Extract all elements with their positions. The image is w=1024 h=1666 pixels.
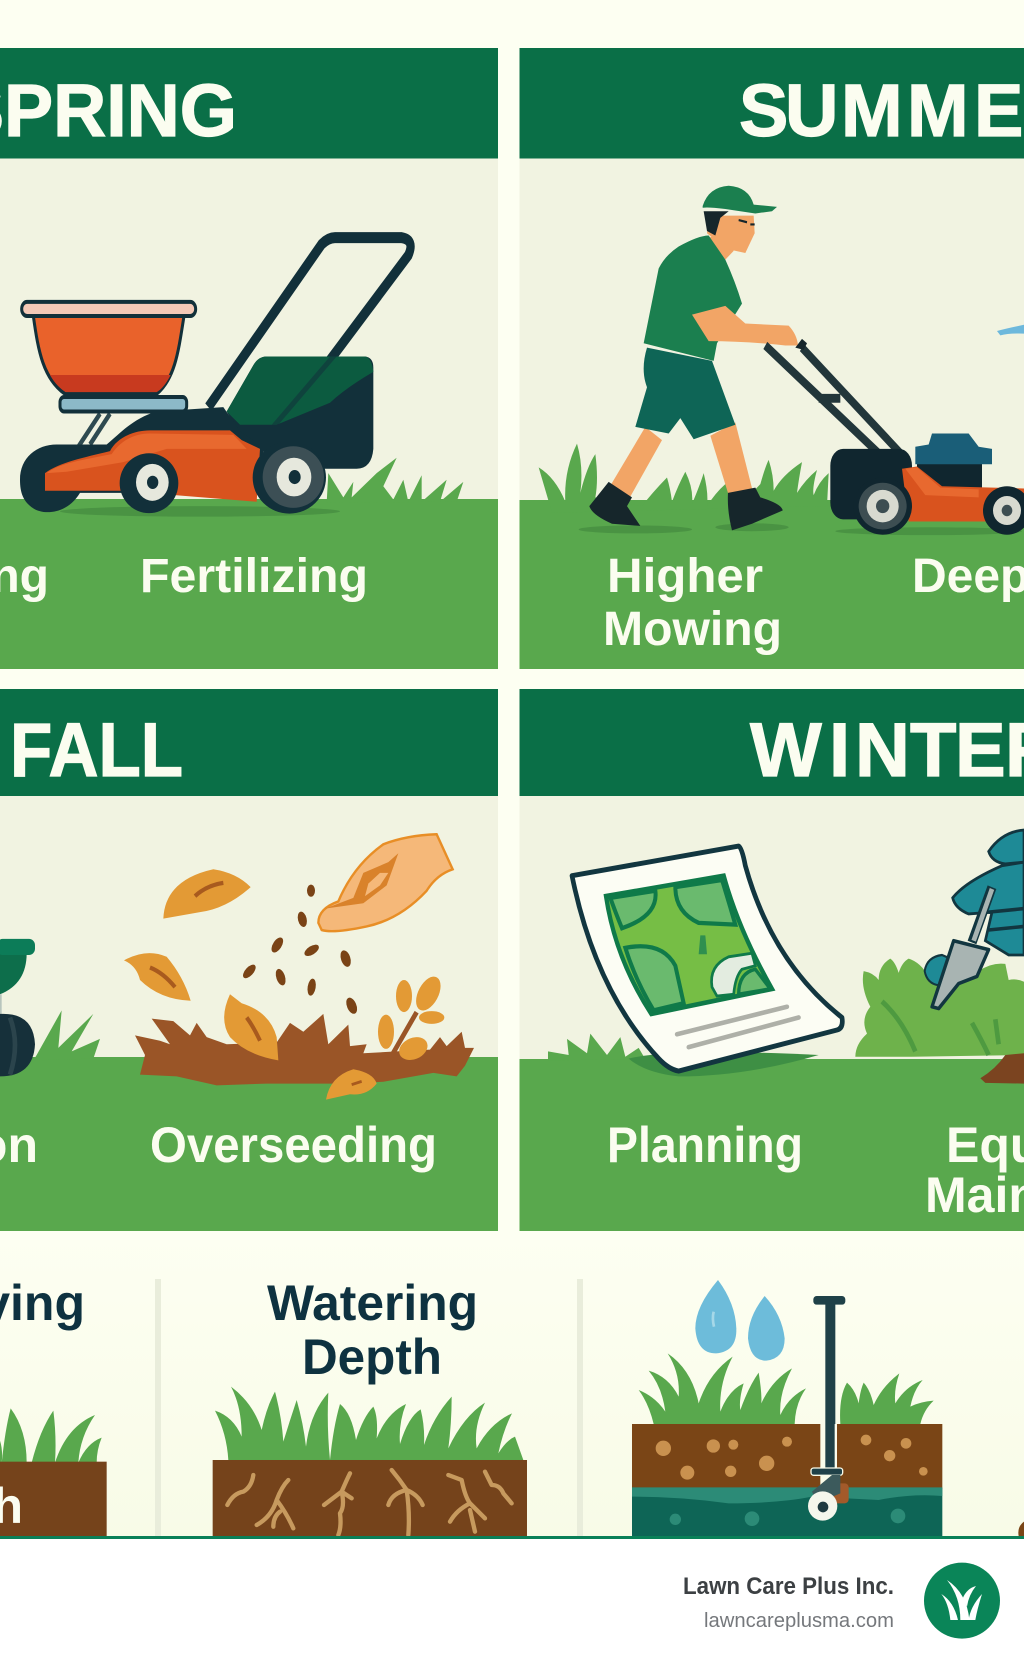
summer header bar <box>520 48 1024 158</box>
label: higher mowing <box>603 550 782 656</box>
winter ground <box>520 1059 1024 1231</box>
heading: watering depth: Watering <box>267 1275 478 1331</box>
fall header bar <box>0 689 498 796</box>
icon: logo <box>924 1563 1000 1639</box>
label: equipment maintenance <box>925 1117 1024 1223</box>
illustration: lawn plan and equipment <box>548 830 1024 1084</box>
illustration: man pushing mower <box>539 186 1024 535</box>
fall heading: FALL <box>10 708 183 793</box>
panel: summer <box>520 48 1024 669</box>
spring header bar <box>0 48 498 158</box>
illustration: fertilizer spreader and mower <box>20 238 463 517</box>
winter header bar <box>520 689 1024 796</box>
company url: lawncareplusma.com <box>704 1610 894 1632</box>
heading: watering depth <box>267 1275 478 1385</box>
label: higher mowing: Mowing <box>603 603 782 656</box>
spring ground <box>0 499 498 669</box>
panel: comparison strip <box>0 1231 1024 1536</box>
label: planning: Planning <box>607 1117 803 1173</box>
illustration: spreader, leaves and overseeding hand <box>0 834 474 1100</box>
label: higher mowing: Higher <box>607 550 763 603</box>
label: fertilizing: Fertilizing <box>140 550 368 603</box>
label: overseeding: Overseeding <box>150 1117 437 1173</box>
footer rule <box>0 1536 1024 1539</box>
illustration: grass with deep roots <box>213 1387 527 1536</box>
footer <box>0 1539 1024 1666</box>
illustration: mowing height soil <box>0 1408 107 1536</box>
summer ground <box>520 500 1024 669</box>
fall ground <box>0 1057 498 1231</box>
panel: fall <box>0 689 498 1231</box>
heading: watering depth: Depth <box>302 1329 442 1385</box>
panel: winter <box>520 689 1024 1231</box>
panel: spring <box>0 48 498 669</box>
illustration: drops and soil probe <box>632 1280 1024 1536</box>
company name: Lawn Care Plus Inc. <box>683 1573 894 1600</box>
